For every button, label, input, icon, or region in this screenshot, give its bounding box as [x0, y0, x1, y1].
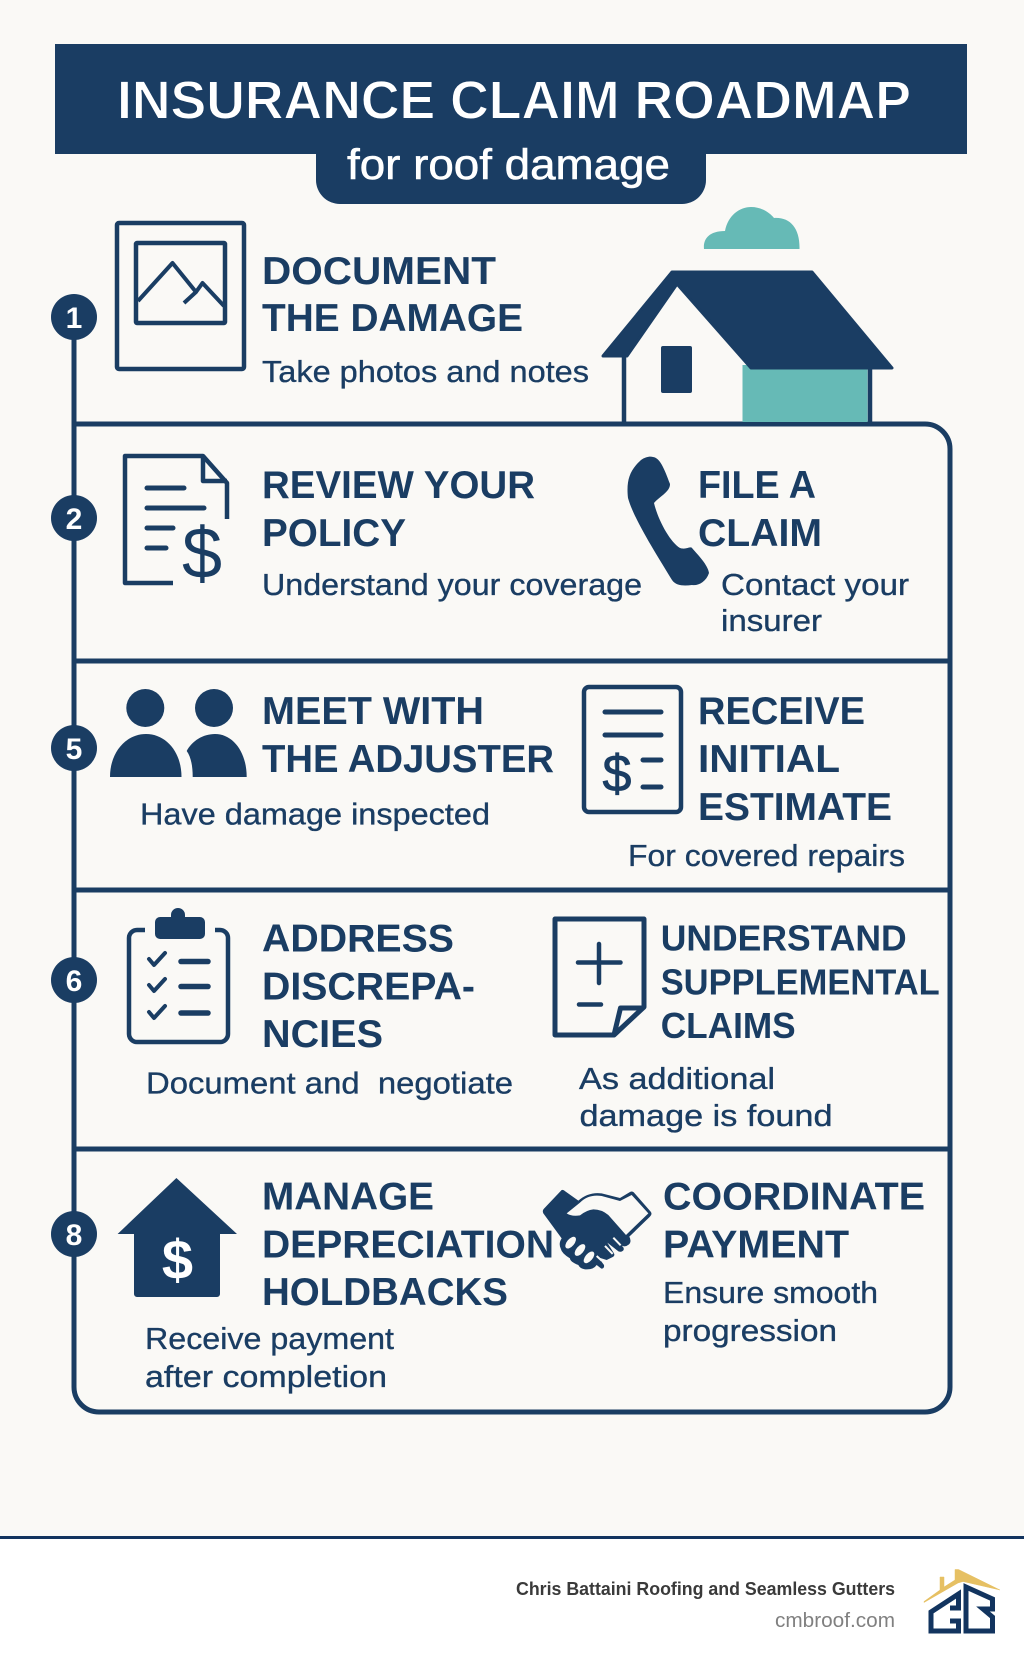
step: understand supplemental claims: As additional: [579, 1061, 775, 1096]
step number 2: [51, 495, 97, 541]
step: understand supplemental claims: UNDERSTAND: [661, 918, 907, 959]
step: manage depreciation holdbacks: MANAGE: [262, 1176, 434, 1218]
icon: two people: [110, 689, 247, 777]
icon: photo: [117, 223, 244, 369]
step: review your policy: Understand your coverage: [262, 567, 642, 602]
roadmap frame and timeline: [74, 317, 950, 1412]
step: file a claim: CLAIM: [698, 512, 822, 555]
step number 6: [51, 957, 97, 1003]
icon: supplemental sheet: [555, 919, 644, 1035]
icon: policy document: $: [182, 514, 222, 594]
step: coordinate payment: [663, 1176, 925, 1348]
step: manage depreciation holdbacks: [145, 1176, 554, 1394]
step number 8: 8: [66, 1219, 82, 1252]
step: review your policy: REVIEW YOUR: [262, 464, 535, 507]
step number 2: 2: [66, 503, 82, 536]
roof: [603, 272, 892, 368]
step: coordinate payment: COORDINATE: [663, 1176, 925, 1218]
step number 5: 5: [66, 733, 82, 766]
step: file a claim: Contact your: [721, 567, 909, 602]
step: document the damage: DOCUMENT: [262, 250, 496, 293]
icon: estimate sheet: [584, 687, 681, 812]
title: INSURANCE CLAIM ROADMAP: [117, 70, 911, 130]
website: cmbroof.com: [775, 1610, 895, 1632]
step number 1: [51, 294, 97, 340]
step: understand supplemental claims: CLAIMS: [661, 1005, 796, 1046]
step: manage depreciation holdbacks: after completion: [145, 1359, 387, 1394]
step: address discrepancies: [146, 918, 513, 1100]
step: document the damage: [262, 250, 589, 389]
step: address discrepancies: DISCREPA-: [262, 966, 475, 1008]
step: file a claim: [698, 464, 909, 638]
cloud: [704, 207, 800, 249]
step number 8: [51, 1211, 97, 1257]
footer: [0, 1536, 1024, 1666]
step number 5: [51, 725, 97, 771]
icon: clipboard checklist: [129, 908, 228, 1042]
step: coordinate payment: PAYMENT: [663, 1223, 849, 1266]
icon: house with cloud: [603, 207, 892, 424]
step: manage depreciation holdbacks: Receive payment: [145, 1321, 394, 1356]
step: manage depreciation holdbacks: HOLDBACKS: [262, 1271, 508, 1314]
step: meet with the adjuster: MEET WITH: [262, 690, 484, 733]
step: receive initial estimate: RECEIVE: [698, 690, 865, 733]
icon: policy document: [125, 456, 227, 594]
step: receive initial estimate: INITIAL: [698, 738, 840, 781]
step number 6: 6: [66, 965, 82, 998]
icon: estimate sheet: $: [603, 745, 632, 803]
step: coordinate payment: Ensure smooth: [663, 1275, 878, 1310]
company name: Chris Battaini Roofing and Seamless Gutters: [516, 1579, 895, 1599]
step: manage depreciation holdbacks: DEPRECIATION: [262, 1223, 554, 1266]
step: review your policy: [262, 464, 642, 602]
logo: [924, 1570, 1000, 1631]
step: understand supplemental claims: damage is found: [580, 1098, 832, 1133]
step: file a claim: FILE A: [698, 464, 816, 507]
step: meet with the adjuster: [140, 690, 554, 832]
step: address discrepancies: NCIES: [262, 1013, 383, 1056]
step: understand supplemental claims: SUPPLEMENTAL: [661, 962, 940, 1003]
title banner: [55, 44, 967, 204]
subtitle: for roof damage: [347, 141, 670, 189]
step: receive initial estimate: [628, 690, 905, 873]
step: receive initial estimate: ESTIMATE: [698, 786, 892, 829]
step: meet with the adjuster: Have damage inspected: [140, 796, 490, 832]
step: review your policy: POLICY: [262, 512, 406, 555]
step: file a claim: insurer: [721, 603, 822, 638]
step: coordinate payment: progression: [663, 1313, 837, 1348]
step: receive initial estimate: For covered repairs: [628, 838, 905, 873]
step: meet with the adjuster: THE ADJUSTER: [262, 738, 554, 781]
step number 1: 1: [66, 302, 82, 335]
icon: handshake: [543, 1190, 652, 1269]
icon: house with dollar: $: [162, 1228, 193, 1291]
step: address discrepancies: Document and negotiate: [146, 1066, 513, 1100]
icon: house with dollar: [118, 1178, 237, 1297]
step: document the damage: Take photos and notes: [262, 354, 589, 389]
step: address discrepancies: ADDRESS: [262, 918, 454, 960]
step: understand supplemental claims: [579, 918, 940, 1133]
icon: phone: [628, 457, 709, 585]
step: document the damage: THE DAMAGE: [262, 297, 523, 340]
